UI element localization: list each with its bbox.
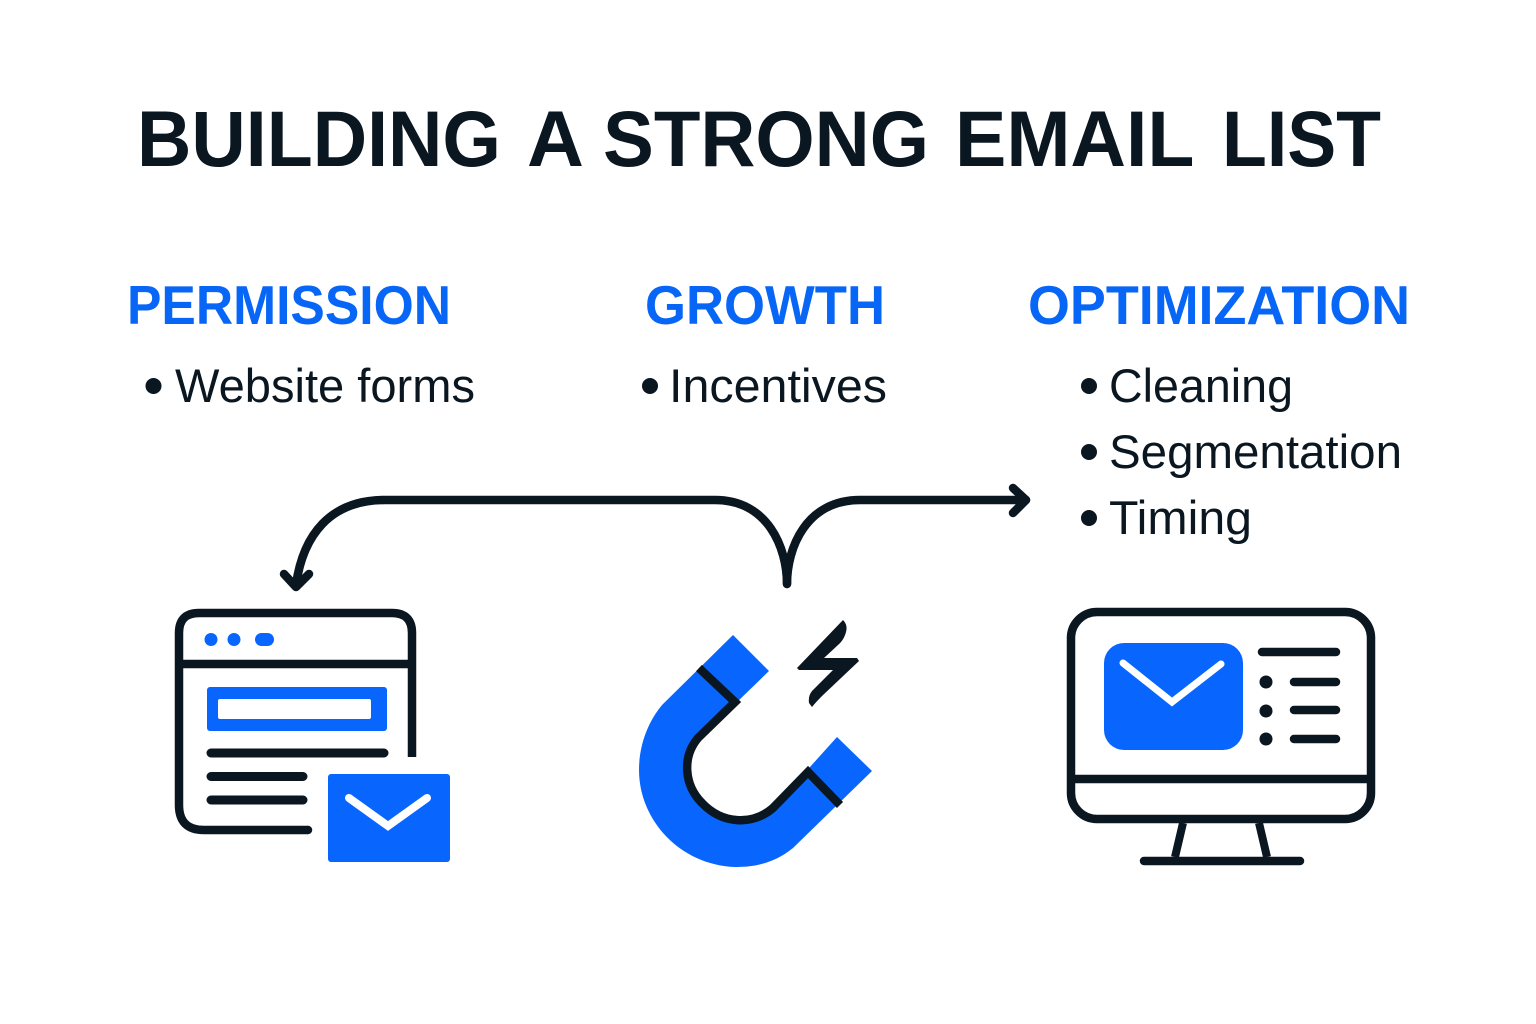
lightning bolt [797,620,859,707]
arrow: branching from magnet to form and to optimization [284,488,1026,587]
content list [1260,652,1336,746]
column: growth [642,274,887,412]
form input field [207,687,387,731]
icon: magnet with lightning bolt [639,620,872,867]
magnet inner outline [687,668,840,820]
column: permission [127,274,475,412]
browser title bar divider [179,660,412,668]
heading: growth: GROWTH [645,274,885,336]
envelope [328,774,450,862]
monitor frame [1071,612,1371,819]
icon: monitor with email [1071,612,1371,861]
heading: optimization: OPTIMIZATION [1028,274,1410,336]
monitor stand [1175,823,1267,857]
email envelope [1104,643,1243,750]
form text lines [211,753,384,800]
monitor divider [1071,775,1371,783]
title: STRONG [603,94,929,183]
title: A [527,94,582,183]
heading: permission: PERMISSION [127,274,451,336]
title: BUILDING [137,94,501,183]
icon: website form with envelope [179,613,450,862]
column: optimization [1028,274,1410,544]
browser dots [204,633,274,646]
browser window outline [179,613,412,834]
bullet item: website forms: Website forms [175,359,475,412]
monitor base [1144,857,1300,865]
magnet body [639,635,872,867]
bullet item: segmentation: Segmentation [1109,425,1402,478]
bullet item: timing: Timing [1109,491,1252,544]
title: EMAIL [955,94,1193,183]
bullet item: incentives: Incentives [669,359,887,412]
title: LIST [1222,94,1381,183]
bullet item: cleaning: Cleaning [1109,359,1293,412]
